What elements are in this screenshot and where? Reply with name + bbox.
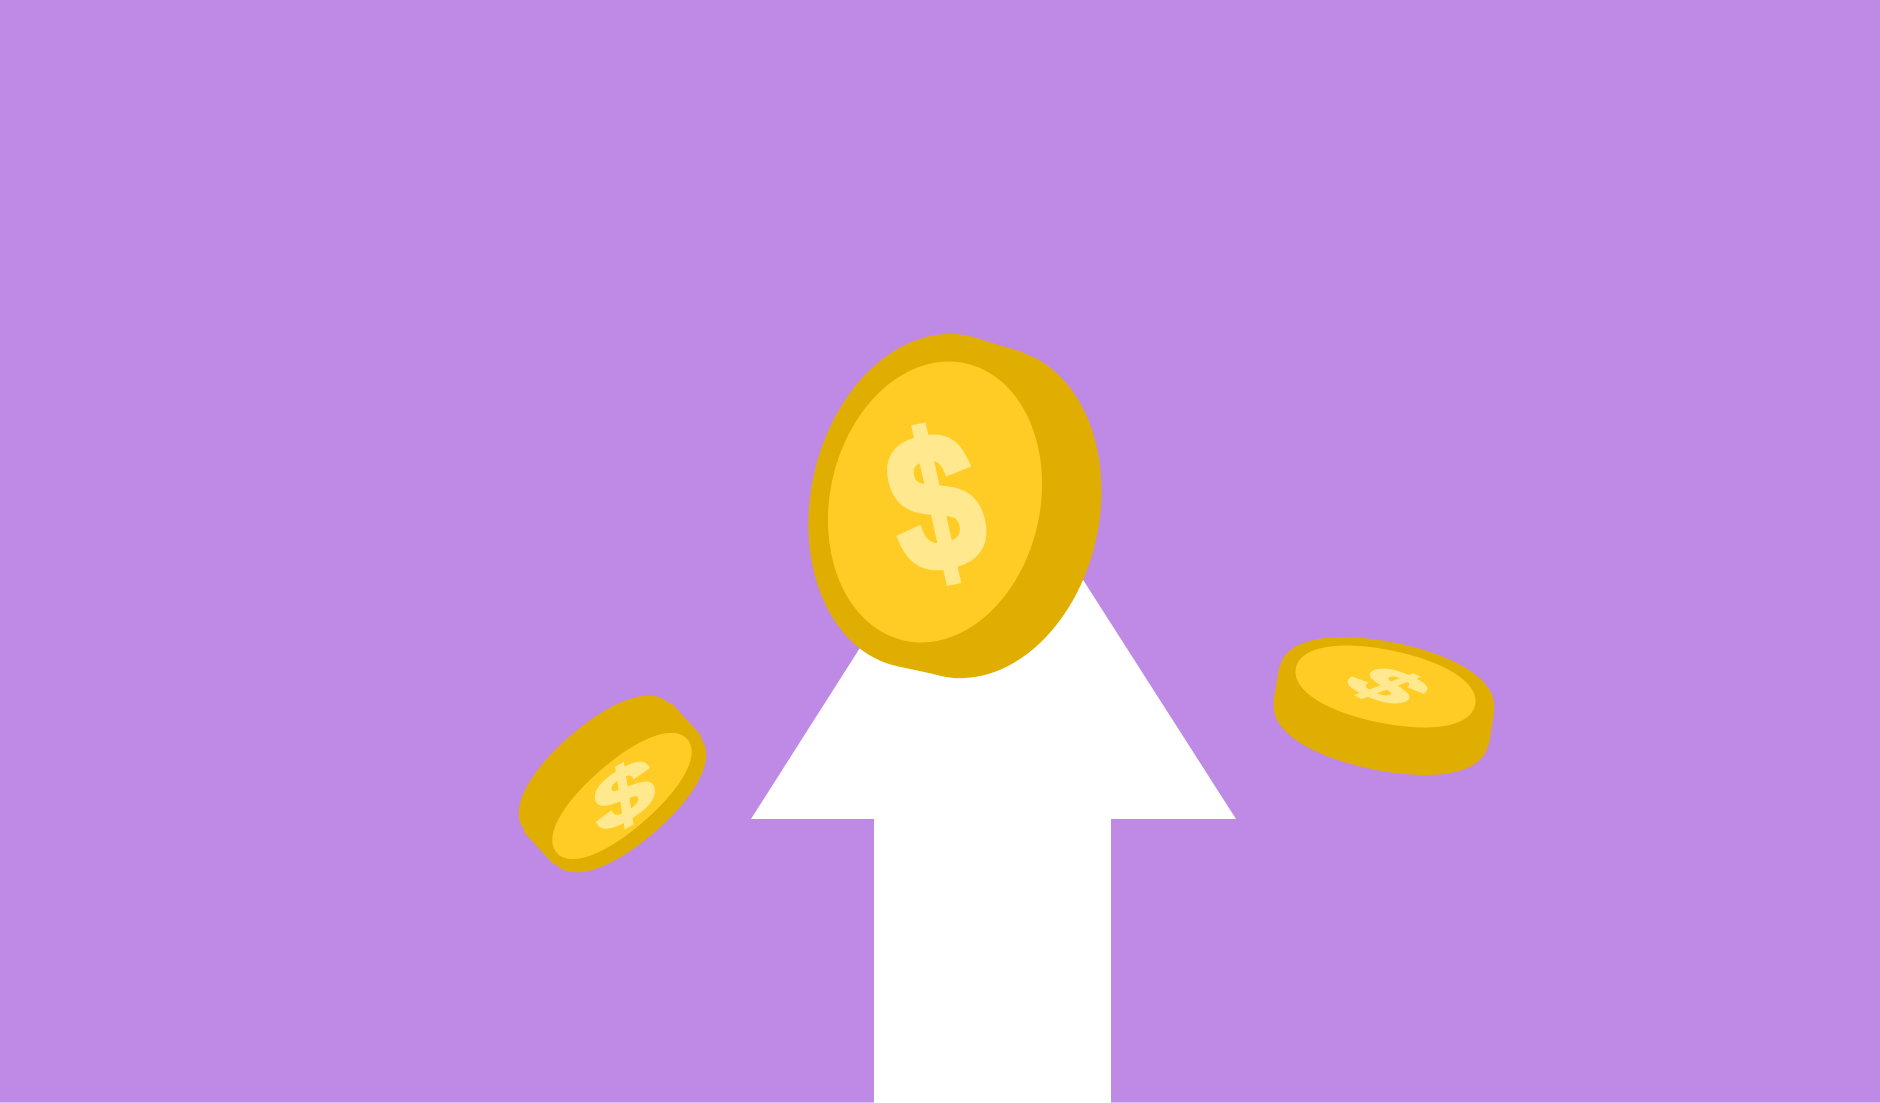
dollar sign: $ (1322, 659, 1453, 713)
coin face (1288, 632, 1483, 741)
dollar sign: $ (869, 389, 1002, 616)
coin face (802, 341, 1068, 663)
coin edge (777, 310, 1132, 702)
coin edge (498, 673, 727, 895)
coin face (535, 714, 709, 878)
coin: large centre coin (777, 310, 1132, 702)
coin: small right coin (1265, 621, 1503, 791)
dollar sign: $ (588, 738, 659, 853)
arrow: white upward arrow (751, 439, 1236, 1103)
coin edge (1265, 621, 1503, 791)
coin: small left coin (498, 673, 727, 895)
